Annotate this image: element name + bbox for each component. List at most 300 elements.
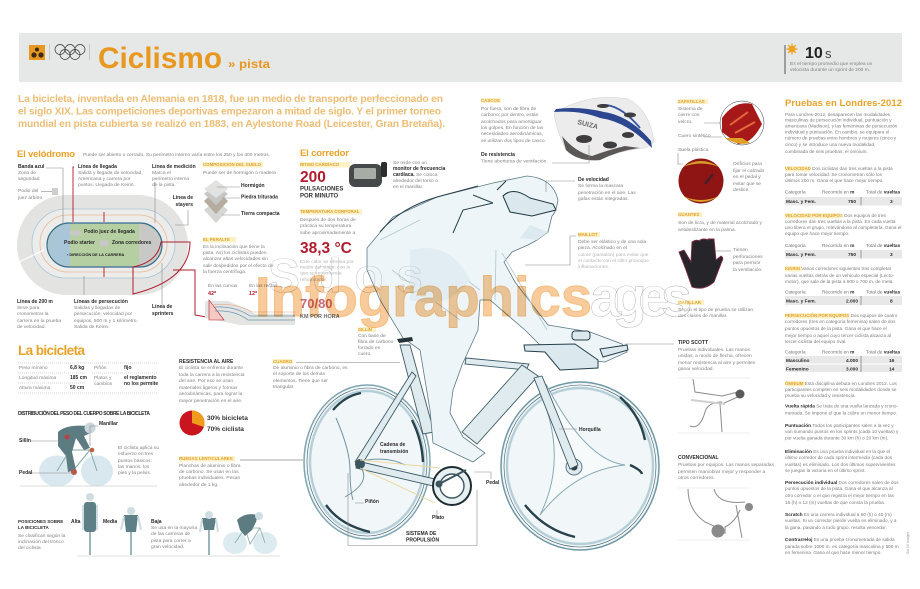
icon: olympic rings xyxy=(50,44,90,60)
weight distribution heading: DISTRIBUCIÓN DEL PESO DEL CUERPO SOBRE LA BICICLETA xyxy=(18,409,150,417)
panel: manillar: CONVENCIONAL xyxy=(678,455,719,461)
table: velocidad por equipos: 750 xyxy=(848,252,856,258)
panel: ruedas lenticulares: de carbono. Se usan en las xyxy=(179,469,239,475)
panel: el peralte: 12º xyxy=(249,291,257,297)
glove image xyxy=(679,239,723,288)
heading: pruebas en londres: Pruebas en Londres-2012 xyxy=(785,98,902,109)
panel: manillar: unidas, a modo de flecha, ofrecen xyxy=(678,353,752,359)
panel: el peralte xyxy=(203,237,295,325)
table: velocidad por equipos: Recorrido en m xyxy=(822,243,854,249)
track diagram: Podio starter xyxy=(64,240,95,246)
event: persecución por equipos: mejor tiempo o aquel cuyo tercer ciclista alcanza al xyxy=(785,333,891,338)
saddle xyxy=(397,337,413,343)
panel: el corredor: práctica su temperatura xyxy=(300,223,352,229)
panel: cascos: acolchados para amortiguar xyxy=(481,119,542,125)
panel: cascos xyxy=(481,97,654,164)
rider xyxy=(367,176,627,462)
heading: la bicicleta: La bicicleta xyxy=(18,343,85,358)
weight distribution cyclist: esfuerzo en tres xyxy=(118,451,154,457)
label: maillot xyxy=(525,232,649,270)
event: persecución por equipos: PERSECUCIÓN POR EQUIPOS Dos equipos de cuatro xyxy=(785,313,897,318)
label: de velocidad xyxy=(546,177,636,202)
label: líneas de persecución: equipos, 500 m y 1 kilómetro. xyxy=(74,318,138,324)
event: persecución por equipos: tercer ciclista del equipo rival. xyxy=(785,339,846,344)
panel: zapatillas: velcro. xyxy=(678,119,692,125)
stat: speed xyxy=(300,296,340,320)
panel: ruedas lenticulares: pruebas individuales. Pesan xyxy=(179,475,240,481)
watermark: Infographics xyxy=(255,265,592,328)
weight distribution cyclist: pies y la pelvis. xyxy=(118,470,151,476)
panel: zapatillas: cierre con xyxy=(678,112,700,118)
table: persecución por equipos xyxy=(785,350,902,372)
specifications table: cambios xyxy=(94,381,113,387)
weight distribution cyclist: Manillar xyxy=(99,421,118,427)
callout: 10 seconds: Es el tiempo promedio que emplea un xyxy=(790,61,873,67)
panel: manillar: Pruebas individuales. Las manos xyxy=(678,347,750,353)
event: keirin xyxy=(785,266,902,305)
table: keirin: 2.000 xyxy=(846,298,858,304)
panel: resistencia al aire: RESISTENCIA AL AIRE xyxy=(179,359,234,365)
panel: resistencia al aire: mayor penetración en el aire. xyxy=(179,398,242,404)
event descriptions: otro corredor o el que registra el mejor tiempo en las xyxy=(785,493,895,498)
event: keirin: KEIRIN Varios corredores siguientes tras completar xyxy=(785,266,891,271)
label: línea de medición: perímetro interno xyxy=(152,176,190,182)
riding positions: Se usa en la mayoría xyxy=(151,525,197,531)
specifications table: Peso mínimo xyxy=(19,365,48,371)
floor layers diagram xyxy=(204,180,240,223)
panel: composición del suelo: Hormigón xyxy=(241,183,265,189)
icon: heart-rate monitor xyxy=(349,162,387,187)
panel: guantes xyxy=(678,212,763,288)
panel: guantes: GUANTES xyxy=(678,212,700,217)
label: líneas de persecución: Líneas de persecución xyxy=(74,299,128,305)
event descriptions: Puntuación Todos los participantes salen a la vez y xyxy=(785,423,894,429)
panel: zapatillas: ZAPATILLAS xyxy=(678,99,705,104)
table: persecución por equipos: 14 xyxy=(889,366,895,372)
panel: guantes: la ventilación. xyxy=(733,267,763,273)
front disc wheel xyxy=(501,382,659,550)
label: línea de stayers: Línea de xyxy=(173,195,193,201)
label: línea de medición: de la pista. xyxy=(152,182,176,188)
riding positions: gran velocidad. xyxy=(151,544,184,550)
table: velocidad por equipos: 3 xyxy=(890,252,893,258)
table: velocidad: 3 xyxy=(890,199,893,205)
label: línea de 200 m: cronometrar la xyxy=(17,311,49,317)
intro text: Para Londres-2012, desaparecen las modalidades xyxy=(785,112,891,117)
panel: el corredor: en el manillar. xyxy=(393,184,423,190)
panel: guantes: Son de licra, y de material acolchado y xyxy=(678,220,763,226)
figure: medium position xyxy=(121,507,141,555)
table: velocidad: 750 xyxy=(848,199,856,205)
panel: ruedas lenticulares: alrededor de 1 kg. xyxy=(179,482,218,488)
weight distribution cyclist: El ciclista aplica su xyxy=(118,445,159,451)
table: persecución por equipos: 4.000 xyxy=(846,358,858,364)
label: maillot: culote (pantalón) para evitar que xyxy=(578,252,649,258)
label: cuadro: CUADRO xyxy=(273,359,293,364)
label: línea de sprinters: Línea de xyxy=(152,304,173,310)
callout: 10 seconds: s xyxy=(825,46,832,61)
specifications table: no los permite xyxy=(124,381,158,387)
table: velocidad: Recorrido en m xyxy=(822,190,854,196)
panel: el corredor: alrededor del torso o xyxy=(393,178,438,184)
table: persecución por equipos: 3.000 xyxy=(846,366,858,372)
table: keirin: Masc. y Fem. xyxy=(786,298,816,304)
panel: cascos: CASCOS xyxy=(481,98,500,103)
weight distribution cyclist: Sillín xyxy=(19,438,31,444)
label: línea de 200 m: carrera en la prueba xyxy=(17,318,61,324)
panel: resistencia al aire: del aire. Por eso se usan xyxy=(179,378,233,384)
table: keirin: Total de vueltas xyxy=(866,290,900,296)
panel: el corredor: que se recomienda xyxy=(300,270,342,276)
panel: composición del suelo: Puede ser de hormigón o madera xyxy=(203,170,276,176)
panel: composición del suelo: COMPOSICIÓN DEL SUELO xyxy=(203,162,262,167)
label: de velocidad: De velocidad xyxy=(578,177,609,183)
panel: resistencia al aire: El ciclista se enfrenta durante xyxy=(179,365,243,371)
label: sillín: Con base de xyxy=(358,333,386,339)
panel: el peralte: pista. Así los ciclistas pueden xyxy=(203,250,267,256)
label: línea de llegada: Americana y carrera por xyxy=(78,176,131,182)
drivetrain xyxy=(355,459,471,505)
event: persecución por equipos xyxy=(785,313,902,372)
panel: guantes: Tienen xyxy=(733,247,748,253)
riding positions: Alta xyxy=(71,519,81,525)
riding positions: Se clasifican según la xyxy=(18,533,66,539)
label: propulsion system: Piñón xyxy=(365,499,379,505)
panel: manillar: menor resistencia al aire y permiten xyxy=(678,360,756,366)
table: keirin: Recorrido en m xyxy=(822,290,854,296)
label: propulsion system: SISTEMA DE xyxy=(406,531,437,537)
intro text: número de pruebas entre hombres y mujeres (cinco y xyxy=(785,136,897,140)
panel: zapatillas: en el pedal y xyxy=(733,174,761,180)
watermark: Sdos xyxy=(268,250,423,303)
riding positions: de las carreras de xyxy=(151,531,190,537)
event descriptions: por vuelta ganada durante 30 km (h) o 20 km (m). xyxy=(785,436,888,440)
panel: manillar: Pruebas por equipos. Las manos separadas xyxy=(678,462,775,468)
event: velocidad por equipos: corredores dan tres vueltas a la pista. En cada vuelta xyxy=(785,219,896,224)
event: velocidad por equipos xyxy=(785,213,902,258)
panel: manillar: TIPO SCOTT xyxy=(678,340,708,346)
table: velocidad xyxy=(785,190,902,206)
panel: zapatillas: Cuero sintético xyxy=(678,133,711,139)
intro text: masculinas de persecución individual, puntuación y xyxy=(785,118,892,123)
panel: manillar xyxy=(625,300,775,540)
pie chart xyxy=(180,410,205,436)
track diagram: Podio juez de llegada xyxy=(84,229,135,235)
event: persecución por equipos: corredores (tres en categoría femenina) salen de dos xyxy=(785,319,896,324)
panel: zapatillas: evitar que se xyxy=(733,181,761,187)
watermark xyxy=(255,250,692,328)
panel: manillar: MANILLAR xyxy=(678,300,702,305)
header band xyxy=(19,33,902,82)
intro paragraph: el siglo XIX. Las competiciones deportivas empezaron a mitad de siglo. Y el primer torneo xyxy=(18,106,441,118)
table: velocidad: Total de vueltas xyxy=(866,190,900,196)
label: banda azul: Zona de xyxy=(18,170,36,176)
table: keirin: 8 xyxy=(890,298,893,304)
image credit: Sol 90 Images xyxy=(906,531,910,554)
stat: temperature: 38,3 °C xyxy=(300,240,352,257)
panel: cascos: carbono; por dentro, están xyxy=(481,112,539,118)
table: velocidad: Categoría xyxy=(785,190,806,194)
illustration: cyclist and bicycle xyxy=(304,176,659,550)
heading: el corredor: El corredor xyxy=(300,148,349,159)
event: ómnium: participantes compiten en seis modalidades donde se xyxy=(785,387,897,392)
panel: zapatillas: deslice. xyxy=(733,187,750,193)
panel: el peralte: la fuerza centrífuga. xyxy=(203,269,246,275)
event: ómnium: ÓMNIUM Esta disciplina debuta en Londres 2012. Los xyxy=(785,381,897,386)
panel: zapatillas: Suela plástica xyxy=(678,147,709,153)
panel: zapatillas: fijar el calzado xyxy=(733,168,765,174)
stat: speed: 70/80 xyxy=(300,296,333,311)
label: línea de stayers: stayers xyxy=(175,202,193,208)
panel: guantes: perforaciones xyxy=(733,254,763,260)
panel: el corredor: Este calor se elimina por xyxy=(300,259,354,265)
label: maillot: Debe ser elástico y de una sola xyxy=(578,239,647,245)
specifications table: Piñón xyxy=(94,365,107,371)
weight distribution cyclist xyxy=(19,421,159,486)
event: persecución por equipos: puntos opuestos de la pista. Gana el que hace el xyxy=(785,326,887,331)
track diagram xyxy=(17,167,223,320)
label: cuadro: elementos. Tiene que ser xyxy=(273,378,328,384)
riding positions: Media xyxy=(103,519,117,525)
specifications table: 185 cm xyxy=(70,375,88,381)
table: velocidad por equipos: Categoría xyxy=(785,243,806,248)
banking profile xyxy=(205,300,295,325)
panel: cascos: Tiene aberturas de ventilación. xyxy=(481,158,548,164)
shoe top image xyxy=(720,101,764,145)
panel: resistencia al aire: aerodinámicas, para lograr la xyxy=(179,391,243,397)
label: podio del juez árbitro: Podio del xyxy=(18,188,38,194)
panel: zapatillas: Orificios para xyxy=(733,161,762,167)
label: líneas de persecución: Salida de Keirin. xyxy=(74,324,110,330)
label: línea de llegada: Salida y llegada de velocidad, xyxy=(78,170,143,176)
figure: side view xyxy=(223,512,277,554)
specifications table: Altura máxima xyxy=(19,385,51,391)
panel: manillar: dos clases de manillar. xyxy=(678,313,727,319)
specifications table: Longitud máxima xyxy=(19,375,57,381)
label: sillín: fibra de carbono xyxy=(358,339,394,345)
table: velocidad por equipos: Masc. y Fem. xyxy=(786,252,816,258)
event: ómnium xyxy=(785,381,898,398)
event descriptions: Contrarreloj Es una prueba cronometrada de salida xyxy=(785,537,895,543)
velodrome subtitle: Puede ser abierto o cerrado. Su perímetro interno varía entre los 250 y los 400 metros. xyxy=(83,152,270,158)
panel: manillar: Según el tipo de prueba se utilizan xyxy=(678,307,753,313)
stat: 200 pulsaciones: POR MINUTO xyxy=(300,194,339,200)
heading: el velódromo: El velódromo xyxy=(17,149,75,160)
panel: ruedas lenticulares: RUEDAS LENTICULARES xyxy=(179,456,233,461)
label: línea de 200 m: de velocidad. xyxy=(17,324,46,330)
callout: 10 seconds: velocista durante un sprint de 200 m. xyxy=(790,67,870,73)
panel: composición del suelo xyxy=(203,162,280,223)
label: línea de llegada: puntos. Llegada de Keirin. xyxy=(78,182,135,188)
panel: composición del suelo: Tierra compacta xyxy=(241,211,280,217)
label: banda azul: Banda azul xyxy=(18,164,45,170)
panel: pruebas en londres-2012 xyxy=(785,98,902,555)
weight distribution cyclist: Pedal xyxy=(19,470,33,476)
panel: ruedas lenticulares: Planchas de aluminio o fibra xyxy=(179,463,241,469)
specifications table: fijo xyxy=(124,365,132,371)
event: keirin: varias vueltas detrás de un vehículo especial (Lecto- xyxy=(785,273,895,278)
event: ómnium: prueba su velocidad y resistencia. xyxy=(785,393,856,398)
panel: composición del suelo: Piedra triturada xyxy=(241,194,278,200)
event descriptions: van sumando puntos en los sprints (cada 10 vueltas) y xyxy=(785,429,899,434)
riding positions: POSICIONES SOBRE xyxy=(18,519,63,524)
panel: el peralte: Es la inclinación que tiene la xyxy=(203,244,265,250)
panel: cascos: Por fuera, son de fibra de xyxy=(481,106,536,112)
event descriptions: la gana, pasando a todo grupo, resulta vencedor. xyxy=(785,525,887,530)
panel: cascos: los golpes. En función de las xyxy=(481,125,544,131)
panel: la bicicleta xyxy=(18,343,280,556)
label: líneas de persecución: Salidas y llegadas de xyxy=(74,305,120,311)
event: velocidad xyxy=(785,166,902,206)
intro text: individual y puntuación. En cambio, se equipara el xyxy=(785,130,889,134)
panel: el corredor: TEMPERATURA CORPORAL xyxy=(300,209,360,214)
table: persecución por equipos: Masculino xyxy=(786,358,810,364)
icon: cycling pictogram xyxy=(29,45,45,60)
panel: el corredor: sube aproximadamente a xyxy=(300,230,355,236)
label: cuadro: triangular. xyxy=(273,384,294,390)
panel: guantes: antideslizante en la palma. xyxy=(678,227,736,233)
intro paragraph: mundial en pista cubierta se realizó en 1883, en Aylestone Road (Leicester, Gran Bretaña). xyxy=(18,119,445,130)
event: keirin: motor), que sale de la pista a 600 o 700 m. de meta. xyxy=(785,279,894,284)
track diagram: › DIRECCIÓN DE LA CARRERA xyxy=(67,252,125,257)
table: persecución por equipos: Total de vueltas xyxy=(866,350,900,356)
panel: el peralte: alcanzar altas velocidades sin xyxy=(203,256,268,262)
panel: resistencia al aire xyxy=(179,359,248,436)
table: persecución por equipos: Categoría xyxy=(785,350,806,354)
label: cuadro: el soporte de los demás xyxy=(273,371,325,377)
label: maillot: MAILLOT xyxy=(578,232,598,237)
label: propulsion system: transmisión xyxy=(380,449,408,455)
panel: el corredor: medio del sudor, con lo xyxy=(300,264,351,270)
event descriptions: Eliminación Es una prueba individual en la que el xyxy=(785,449,890,455)
pie legend: 30% bicicleta xyxy=(207,415,248,422)
table: velocidad: Masc. y Fem. xyxy=(786,199,816,205)
riding positions: Baja xyxy=(151,519,162,525)
label: propulsion system: Pedal xyxy=(486,480,500,486)
figure: high position xyxy=(83,493,97,555)
figure: low position xyxy=(200,511,218,555)
event descriptions: Persecución individual Dos corredores salen de dos xyxy=(785,480,898,486)
panel: zapatillas: Sistema de xyxy=(678,106,703,112)
label: línea de sprinters: sprinters xyxy=(152,311,174,317)
panel: resistencia al aire: materiales ligeros y formas xyxy=(179,385,238,391)
panel: el peralte: En las rectas xyxy=(249,283,278,289)
shoe sole image xyxy=(678,158,724,204)
label: maillot: pieza. Acolchado en el xyxy=(578,245,627,251)
panel: el peralte: En las curvas xyxy=(208,283,238,289)
panel: el corredor: Se mide con un xyxy=(393,160,427,166)
panel: el corredor: RITMO CARDÍACO xyxy=(300,162,340,167)
panel: cascos: se utilizan dos tipos de casco. xyxy=(481,138,546,144)
table: persecución por equipos: Recorrido en m xyxy=(822,350,854,356)
label: de velocidad: gafas están integradas. xyxy=(578,196,629,202)
event descriptions: parada sobre 1000 m. en categoría masculina y 500 m xyxy=(785,544,899,549)
event descriptions: puntos opuestos de la pista. Gana el que alcanza al xyxy=(785,486,893,491)
label: propulsion system: PROPULSIÓN xyxy=(406,536,439,544)
panel: resistencia al aire: toda la carrera a la resistencia xyxy=(179,372,245,378)
label: sillín xyxy=(358,327,394,357)
callout: 10 seconds: 10 xyxy=(805,45,823,62)
table: persecución por equipos: 16 xyxy=(889,358,895,364)
riding positions: LA BICICLETA xyxy=(18,525,49,530)
event descriptions: Vuelta rápida Se trata de una vuelta lanzada y crono- xyxy=(785,404,898,410)
label: maillot: el contacto con el sillín provoque xyxy=(578,258,649,264)
rear disc wheel xyxy=(304,385,430,539)
table: keirin xyxy=(785,290,902,305)
frame xyxy=(355,345,578,486)
track diagram: Zona corredores xyxy=(112,240,152,246)
stat: 200 pulsaciones: 200 xyxy=(300,169,326,186)
label: cuadro: De aluminio o fibra de carbono, es xyxy=(273,365,348,371)
specifications table xyxy=(18,363,158,393)
weight distribution cyclist: puntos básicos: xyxy=(118,458,152,464)
riding positions: pista para correr a xyxy=(151,538,191,544)
handlebars xyxy=(524,331,628,370)
event descriptions: 16 (h) o 12 (m) vueltas de que consta la prueba. xyxy=(785,500,885,505)
label: maillot: inflamaciones. xyxy=(578,264,609,270)
panel: zapatillas xyxy=(678,99,765,204)
specifications table: Platos y xyxy=(94,375,112,381)
label: línea de medición: Marca el xyxy=(152,170,171,176)
event: velocidad por equipos: VELOCIDAD POR EQUIPOS Dos equipos de tres xyxy=(785,213,886,218)
label: línea de 200 m: Sirve para xyxy=(17,305,40,311)
panel: el corredor xyxy=(300,148,445,320)
label: sillín: forrado en xyxy=(358,345,381,351)
panel: manillar: ganar velocidad. xyxy=(678,366,714,372)
event: velocidad: VELOCIDAD Dos ciclistas dan tres vueltas a la pista xyxy=(785,166,893,171)
table: keirin: Categoría xyxy=(785,290,806,294)
panel: ruedas lenticulares xyxy=(179,456,303,488)
event descriptions: Scratch Es una carrera individual a 60 (h) o 40 (m) xyxy=(785,512,892,518)
panel: el velódromo xyxy=(17,149,270,330)
label: línea de llegada: Línea de llegada xyxy=(78,164,117,170)
table: velocidad por equipos: Total de vueltas xyxy=(866,243,900,249)
helmet image: SUIZA xyxy=(577,119,599,131)
panel: manillar: permiten maniobrar mejor y responder a xyxy=(678,469,766,475)
intro paragraph: La bicicleta, inventada en Alemania en 1818, fue un medio de transporte perfeccionado en xyxy=(18,94,443,105)
panel: cascos: necesidades aerodinámicas, xyxy=(481,131,543,137)
table: velocidad por equipos xyxy=(785,243,902,258)
handlebar: convencional xyxy=(678,488,753,540)
panel: el corredor: monitor de frecuencia xyxy=(393,166,445,172)
intro text: combinada de seis pruebas: el ómnium. xyxy=(785,149,868,154)
panel: el peralte: 42º xyxy=(208,291,216,297)
label: línea de 200 m: Línea de 200 m xyxy=(17,299,53,305)
specifications table: 6,8 kg xyxy=(70,365,84,371)
panel: el corredor: cardíaca. Se coloca xyxy=(393,172,438,178)
pie legend: 70% ciclista xyxy=(207,426,244,433)
subtitle: » pista xyxy=(228,57,270,71)
label: horquilla: Horquilla xyxy=(579,427,601,433)
event: velocidad: últimos 200 m. Gana el que hace mejor tiempo. xyxy=(785,178,884,183)
label: horquilla xyxy=(559,427,601,433)
label: propulsion system xyxy=(348,442,500,546)
riding positions: del ciclista. xyxy=(18,545,42,551)
event descriptions: vueltas. Si un corredor pierde vuelta es eliminado, y a xyxy=(785,518,897,523)
panel: cascos: De resistencia xyxy=(481,152,515,158)
event descriptions: en femenina. Gana el que hace menor tiempo. xyxy=(785,550,882,555)
event descriptions: metrada. Se impone el que la cubre en menor tiempo. xyxy=(785,410,897,416)
helmet image xyxy=(554,97,654,160)
event descriptions: vueltas) es eliminado. Los dos últimos supervivientes xyxy=(785,462,896,467)
label: banda azul: seguridad xyxy=(18,176,40,182)
riding positions xyxy=(18,493,280,556)
stat: speed: KM POR HORA xyxy=(300,314,340,320)
event: velocidad por equipos: equipo que hace mejor tiempo. xyxy=(785,231,849,236)
watermark: ages xyxy=(590,265,692,328)
label: propulsion system: Cadena de xyxy=(380,442,406,448)
event: velocidad: para tomar velocidad. Se cronometran sólo los xyxy=(785,172,883,177)
